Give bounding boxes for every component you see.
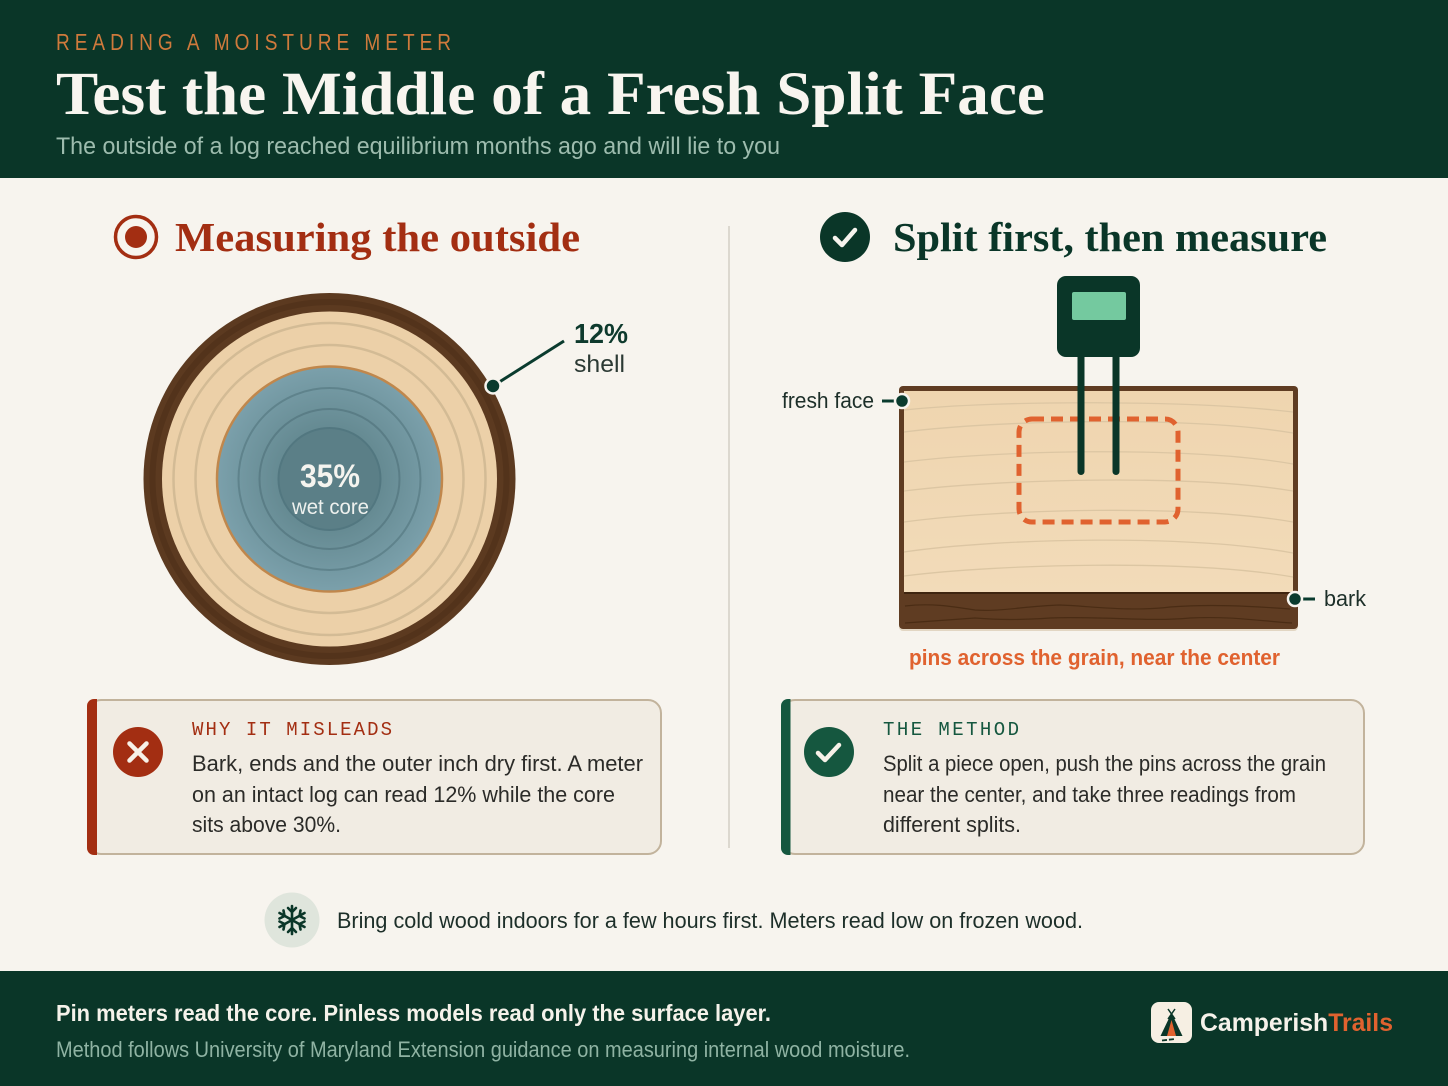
icon: x mark	[113, 727, 163, 777]
card text: Bark, ends and the outer inch dry first. A meter	[192, 751, 643, 776]
bark texture	[905, 605, 1292, 623]
diagram caption: pins across the grain, near the center	[909, 645, 1280, 670]
tip row	[264, 892, 1083, 948]
footer banner	[0, 971, 1448, 1086]
left heading	[116, 214, 580, 260]
header banner	[0, 0, 1448, 178]
callout: fresh face: fresh face	[782, 388, 874, 413]
heading text: Split first, then measure	[893, 214, 1327, 260]
icon: check badge	[820, 212, 870, 262]
card label: THE METHOD	[883, 719, 1019, 741]
target zone	[1019, 419, 1178, 522]
panel: split first, then measure	[781, 212, 1367, 855]
card text	[192, 751, 643, 837]
callout: 12% shell: 12%	[574, 318, 628, 349]
core reading: 35%	[300, 458, 360, 494]
tip text: Bring cold wood indoors for a few hours first. Meters read low on frozen wood.	[337, 908, 1083, 933]
meter pins	[1078, 350, 1120, 475]
logo wordmark: CamperishTrails	[1200, 1009, 1393, 1037]
core reading	[291, 458, 369, 519]
card text	[883, 751, 1326, 837]
icon: tent	[1151, 1002, 1192, 1043]
callout: bark	[1288, 586, 1367, 611]
column divider	[728, 226, 730, 848]
card text: on an intact log can read 12% while the core	[192, 782, 615, 807]
right heading	[820, 212, 1327, 262]
heading text: Measuring the outside	[175, 214, 580, 260]
log cross-section chart	[144, 293, 516, 665]
icon: snowflake	[264, 892, 320, 948]
panel: measuring the outside	[87, 214, 661, 855]
subtitle: The outside of a log reached equilibrium months ago and will lie to you	[56, 133, 780, 160]
icon: check mark	[804, 727, 854, 777]
card text: sits above 30%.	[192, 812, 341, 837]
moisture meter	[1057, 276, 1140, 357]
split wood diagram	[899, 276, 1298, 631]
card text: near the center, and take three readings from	[883, 782, 1296, 807]
eyebrow: READING A MOISTURE METER	[56, 29, 456, 55]
callout: 12% shell	[486, 318, 628, 394]
title: Test the Middle of a Fresh Split Face	[56, 61, 1045, 128]
card: the method	[781, 699, 1364, 855]
callout: bark: bark	[1324, 586, 1367, 611]
card text: different splits.	[883, 812, 1021, 837]
footer takeaway: Pin meters read the core. Pinless models read only the surface layer.	[56, 1000, 771, 1026]
core reading: wet core	[291, 496, 369, 519]
card: why it misleads	[87, 699, 661, 855]
callout: 12% shell: shell	[574, 351, 625, 378]
footer source: Method follows University of Maryland Extension guidance on measuring internal wood moisture.	[56, 1037, 910, 1062]
grain lines	[904, 403, 1293, 577]
card text: Split a piece open, push the pins across the grain	[883, 751, 1326, 776]
logo	[1151, 1002, 1393, 1043]
icon: target	[116, 216, 156, 258]
card label: WHY IT MISLEADS	[192, 719, 392, 741]
